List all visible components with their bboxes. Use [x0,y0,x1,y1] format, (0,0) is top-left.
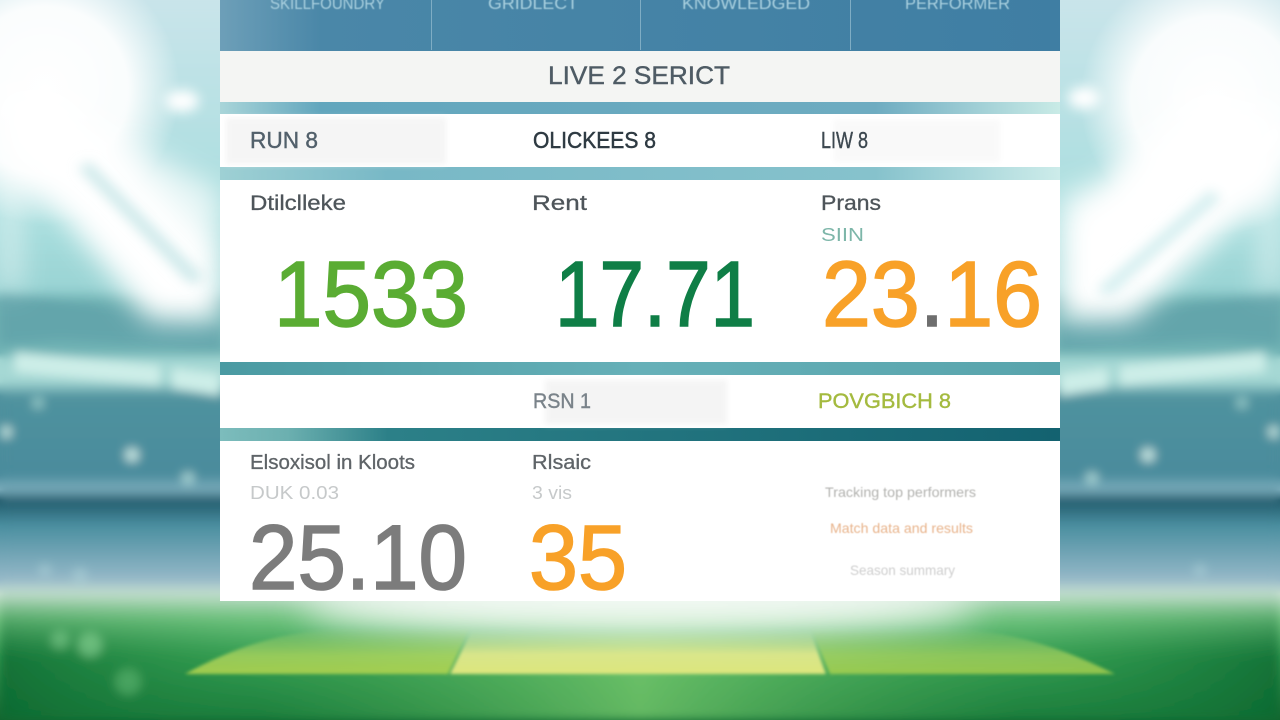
panel: secondary tabs row [220,375,1060,428]
stat: 23.16: 23.16 [822,242,1042,346]
stat: 23.16 [821,192,1042,346]
tab: powerplay: POVGBICH 8 [818,390,951,413]
notes list: Match data and results [830,520,973,536]
divider strips [220,102,1060,441]
notes list: Tracking top performers [825,484,976,500]
stat: 23.16: SIIN [821,225,864,245]
stat: 17.71: 17.71 [555,242,755,346]
stat: 35: 35 [529,507,627,609]
stat: 1533: Dtilclleke [250,192,346,215]
navigation labels [270,0,1010,13]
stat: 1533: 1533 [274,242,468,346]
stat: 25.10: 25.10 [249,507,467,609]
panel: main stats [220,180,1060,362]
title: LIVE 2 SERICT [548,62,730,90]
stat: 35: 3 vis [532,483,572,503]
stat: 35: Rlsaic [532,452,591,474]
tab: live: LIW 8 [821,127,868,153]
notes list: Season summary [850,562,955,578]
tab: run: RUN 8 [250,127,318,153]
stat: 25.10: DUK 0.03 [250,483,339,503]
stat: 35 [529,452,627,609]
tab: wickets: OLICKEES 8 [533,127,656,153]
panel: title band [220,51,1060,102]
tab: rsn: RSN 1 [533,390,591,413]
stat: 17.71: Rent [532,192,587,215]
panel: lower stats [220,441,1060,609]
stadium floodlights [0,0,1280,320]
panel: stat tabs row [220,114,1060,167]
panel: top navigation bar [220,0,1060,51]
notes list [825,484,976,578]
stat: 17.71 [532,192,755,346]
stat: 25.10 [249,452,467,609]
stat: 25.10: Elsoxisol in Kloots [250,452,415,474]
stat: 1533 [250,192,468,346]
cricket pitch [185,571,1115,674]
stat: 23.16: Prans [821,192,881,215]
